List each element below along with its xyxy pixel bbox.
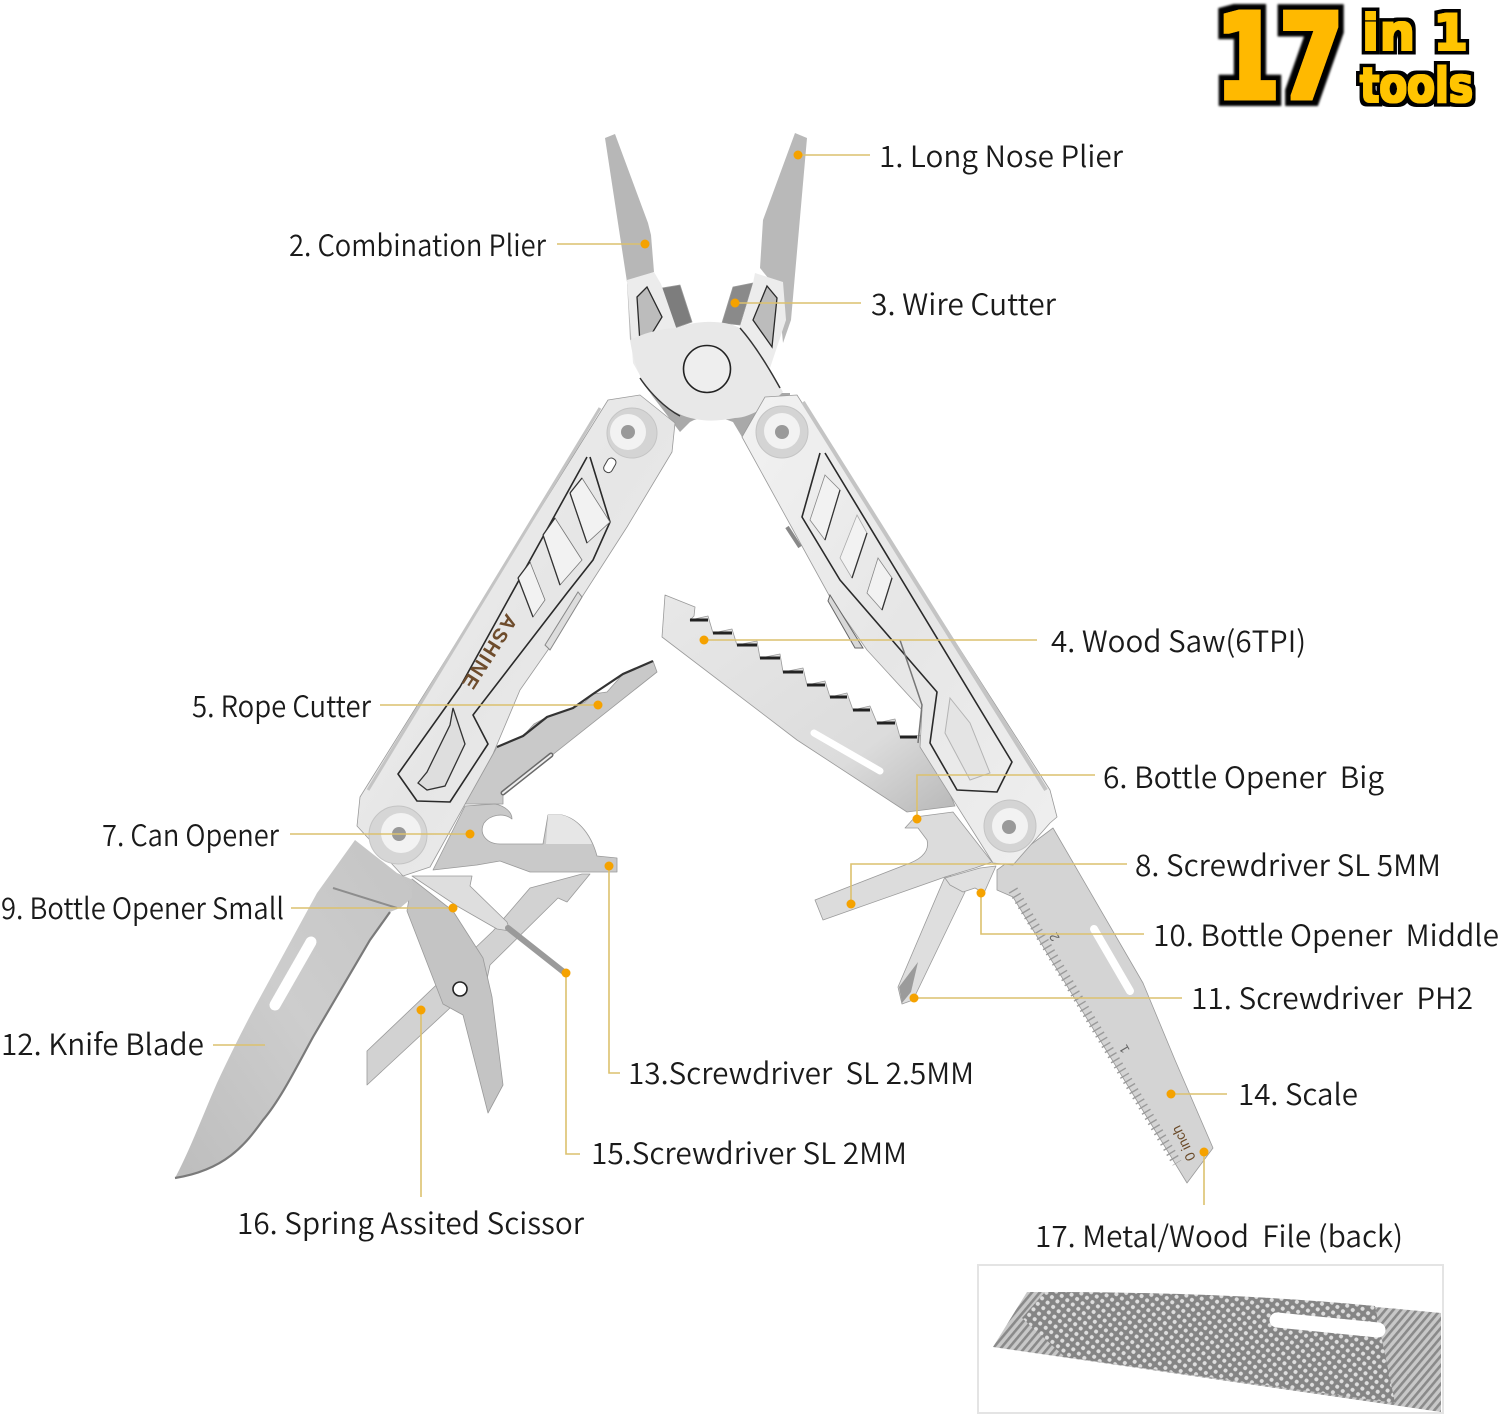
tool: wood saw: [662, 595, 955, 812]
label 13: 2.5mm screwdriver: [604, 862, 974, 1093]
label 3: wire cutter: 3. Wire Cutter: [871, 282, 1057, 324]
label 6: big bottle opener: 6. Bottle Opener Big: [1103, 755, 1385, 797]
label 7: can opener: [102, 813, 474, 855]
tool: big bottle opener and 5mm screwdriver: [815, 812, 992, 920]
label 8: 5mm screwdriver: 8. Screwdriver SL 5MM: [1135, 843, 1441, 885]
label 5: rope cutter: 5. Rope Cutter: [192, 684, 372, 726]
label 6: big bottle opener: [912, 755, 1385, 824]
label 5: rope cutter: [192, 684, 602, 726]
label 9: small bottle opener: 9. Bottle Opener Small: [1, 886, 284, 928]
title badge: 17 in 1 tools: in 1: [1362, 4, 1468, 62]
left handle: [357, 395, 675, 876]
label 13: 2.5mm screwdriver: 13.Screwdriver SL 2.5MM: [628, 1051, 974, 1093]
label 14: scale: [1166, 1072, 1358, 1114]
right plier jaw: [722, 133, 807, 368]
title badge: 17 in 1 tools: tools: [1360, 58, 1473, 114]
label 16: spring assisted scissor: [237, 1006, 585, 1243]
label 17: metal/wood file: [1035, 1148, 1403, 1256]
tool: middle bottle opener: [945, 866, 996, 893]
label 15: 2mm screwdriver: [562, 968, 907, 1173]
tool: spring scissor upper blade: [407, 879, 503, 1113]
label 14: scale: 14. Scale: [1238, 1072, 1358, 1114]
right handle: [742, 395, 1057, 865]
tool: knife blade: [175, 840, 413, 1178]
label 2: combination plier: 2. Combination Plier: [289, 223, 547, 265]
label 11: PH2 screwdriver: [910, 976, 1473, 1018]
brand text: ASHINE: [457, 610, 521, 693]
label 4: wood saw: 4. Wood Saw(6TPI): [1051, 619, 1306, 661]
tool: scale blade with ruler: 0 inch: [1168, 1123, 1199, 1164]
label 3: wire cutter: [730, 282, 1057, 324]
label 15: 2mm screwdriver: 15.Screwdriver SL 2MM: [591, 1131, 907, 1173]
label 16: spring assisted scissor: 16. Spring Assited Scissor: [237, 1201, 585, 1243]
tool: scale blade with ruler: 2: [1046, 930, 1063, 944]
label 7: can opener: 7. Can Opener: [102, 813, 280, 855]
tool: spring scissor lower blade: [367, 874, 590, 1085]
left plier jaw: [605, 134, 692, 395]
plier pivot: [630, 322, 790, 437]
title badge: 17 in 1 tools: [1216, 0, 1473, 126]
label 17: metal/wood file: 17. Metal/Wood File (back): [1035, 1214, 1403, 1256]
inset panel: metal/wood file back: [978, 1265, 1443, 1413]
label 1: long nose plier: 1. Long Nose Plier: [879, 134, 1124, 176]
label 10: middle bottle opener: [976, 888, 1499, 955]
multitool illustration: [175, 133, 1213, 1183]
tool: phillips screwdriver: [898, 872, 965, 1004]
tool: scale blade with ruler: 1: [1116, 1042, 1133, 1056]
label 4: wood saw: [700, 619, 1306, 661]
label 9: small bottle opener: [1, 886, 458, 928]
label 10: middle bottle opener: 10. Bottle Opener Middle: [1153, 913, 1499, 955]
tool: 2.5mm screwdriver and can opener: [433, 804, 617, 872]
label 12: knife blade: 12. Knife Blade: [1, 1022, 204, 1064]
label 11: PH2 screwdriver: 11. Screwdriver PH2: [1191, 976, 1473, 1018]
tool: rope cutter: [465, 661, 657, 804]
tool: scale blade with ruler: [997, 828, 1213, 1183]
label 8: 5mm screwdriver: [846, 843, 1441, 908]
tool: small bottle opener and 2mm screwdriver: [412, 876, 565, 973]
